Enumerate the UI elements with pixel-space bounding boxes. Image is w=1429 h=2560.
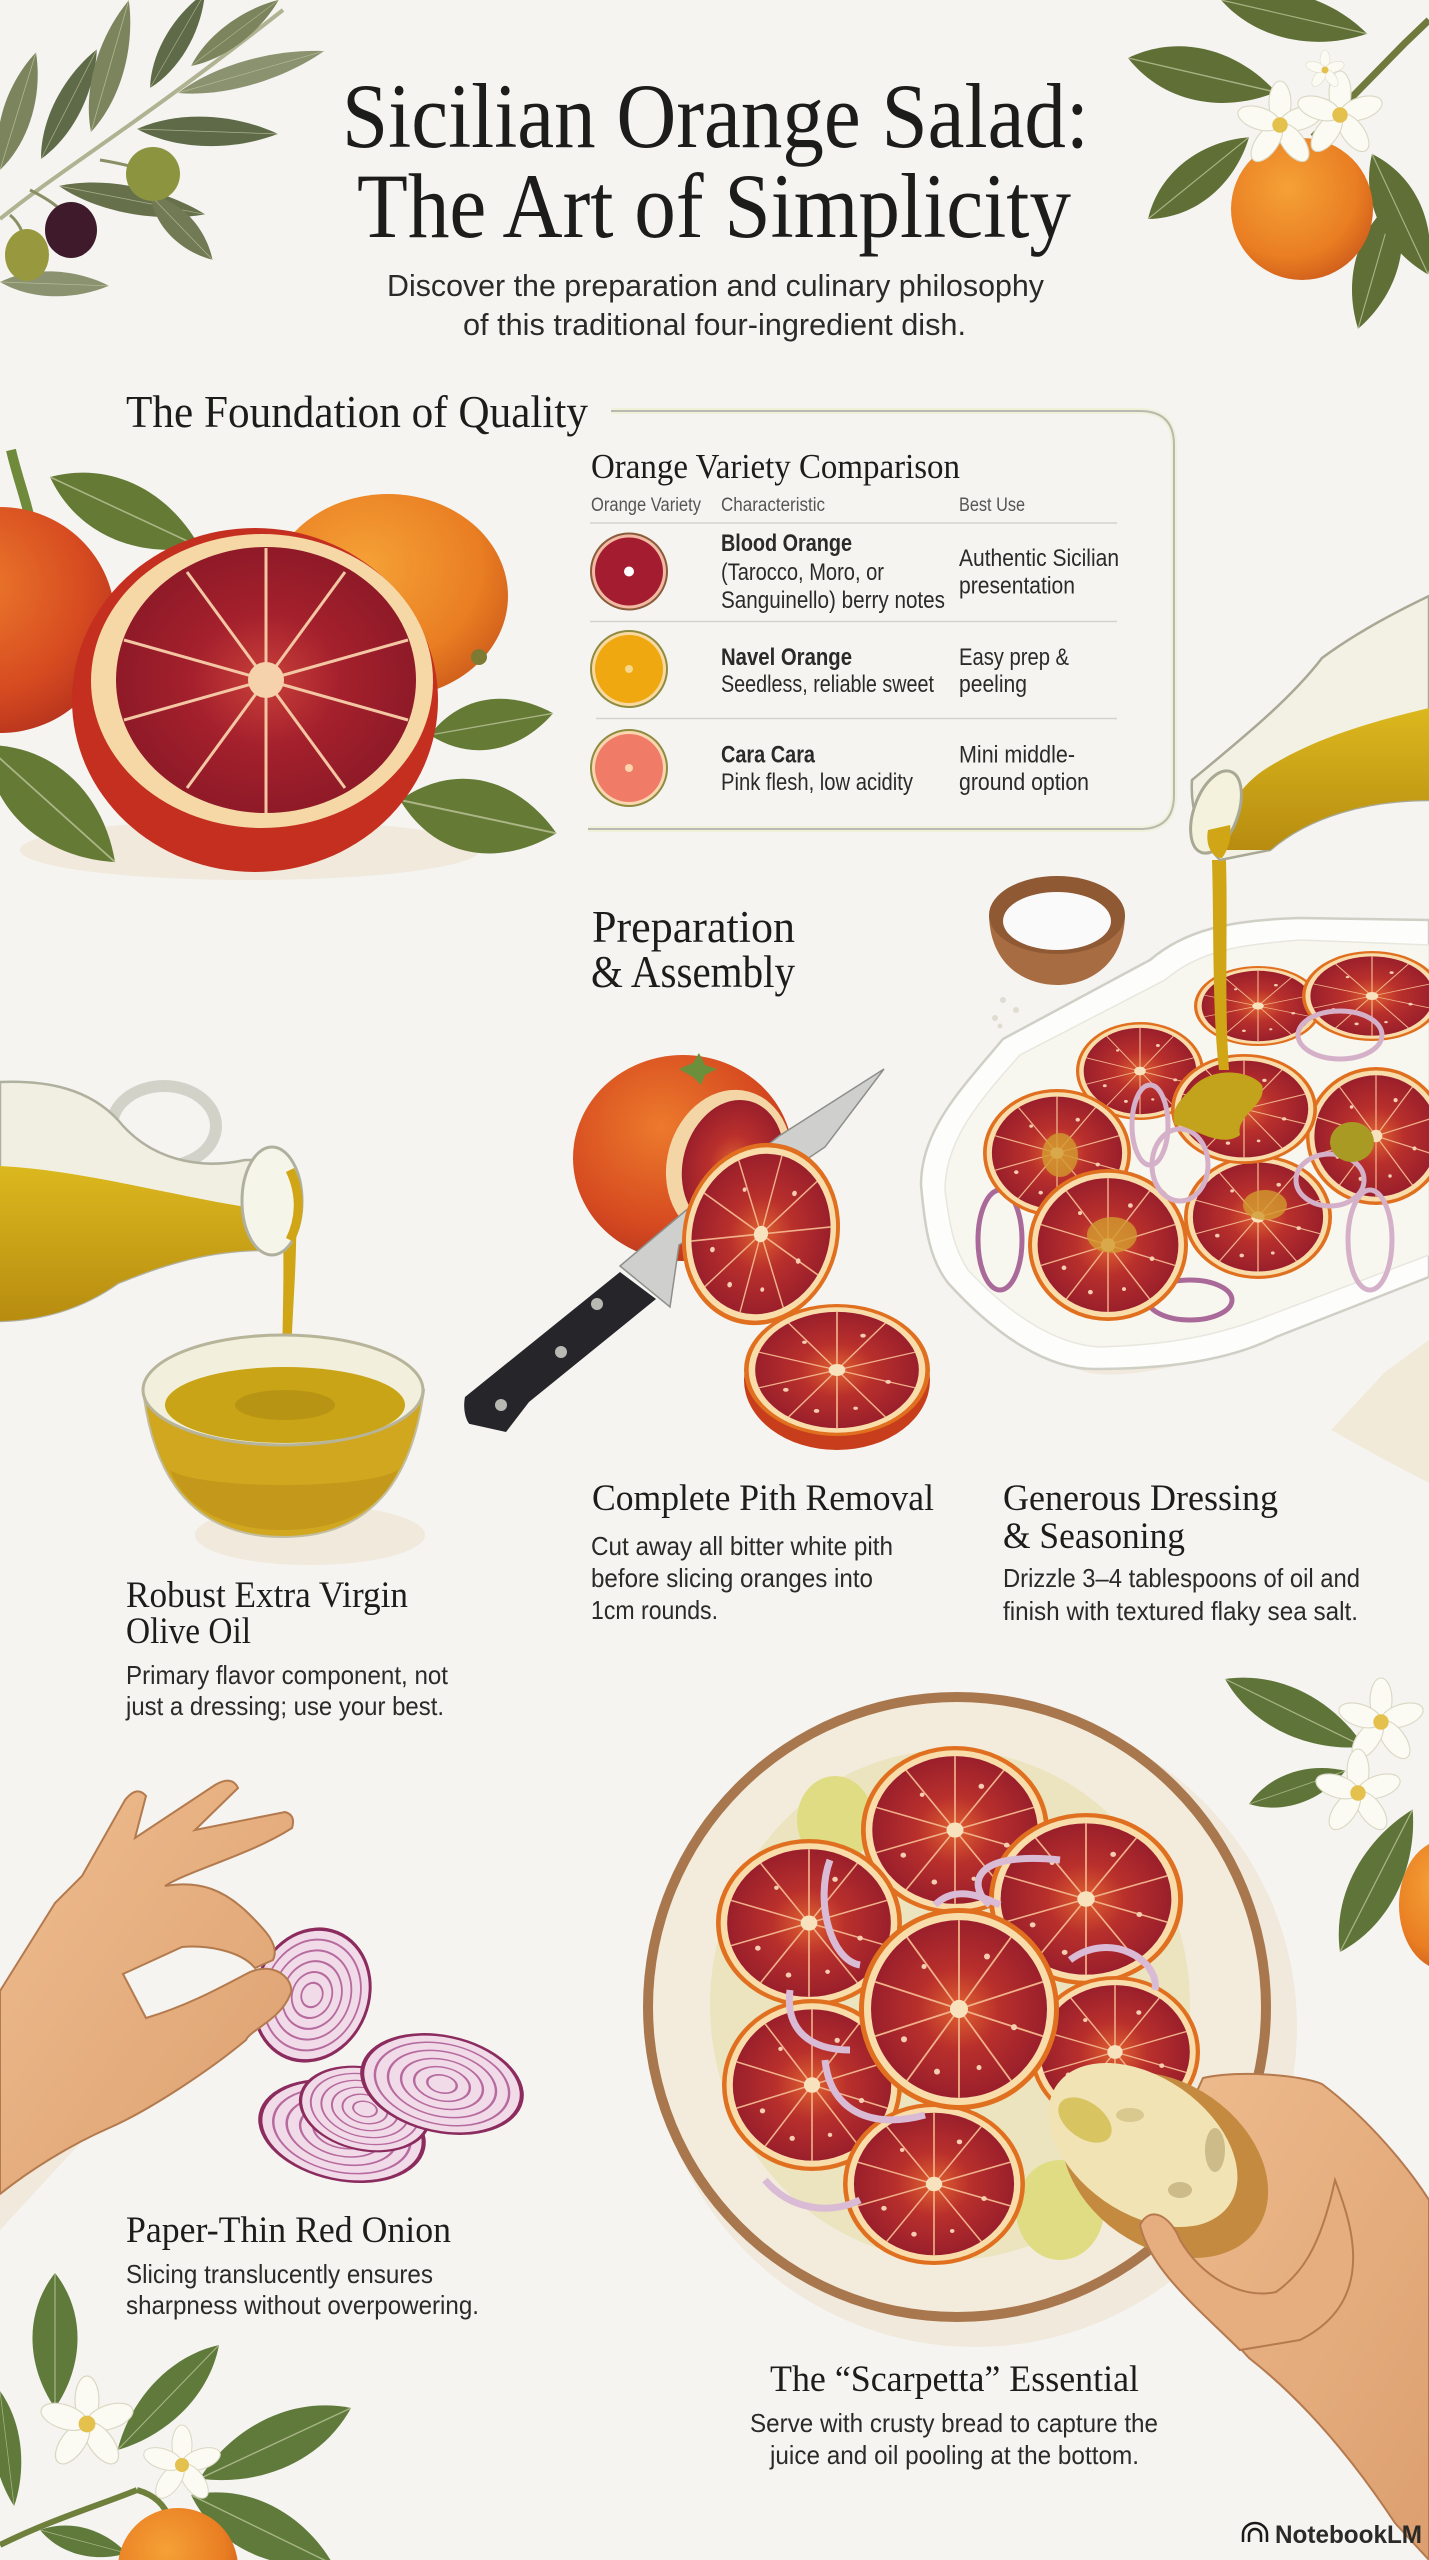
heading: robust olive oil: Olive Oil [126,1611,251,1652]
heading: generous dressing: & Seasoning [1003,1516,1185,1557]
text: pith removal: 1cm rounds. [591,1595,718,1625]
row: cara cara: Mini middle- [959,742,1075,768]
icon: blood orange slice [590,532,668,610]
text: red onion [126,2259,479,2320]
icon: navel orange slice [590,630,668,708]
text: scarpetta [750,2408,1158,2470]
orange blossom branch, bottom left [0,2273,362,2560]
hero oranges [0,450,564,887]
row: blood orange: presentation [959,572,1075,600]
icon: salt bowl [989,876,1125,1028]
title: Sicilian Orange Salad: [342,65,1089,167]
heading: paper-thin red onion: Paper-Thin Red Onion [126,2210,451,2251]
row: blood orange: Blood Orange [721,530,852,557]
text: red onion: Slicing translucently ensures [126,2259,433,2289]
NotebookLM logo: NotebookLM [1275,2521,1422,2549]
hand holding onion slice [0,1781,533,2198]
soft illustration shadows [0,820,1425,2347]
text: scarpetta: Serve with crusty bread to capture the [750,2408,1158,2438]
text: olive oil: just a dressing; use your best. [125,1691,444,1721]
heading: complete pith removal: Complete Pith Removal [592,1478,934,1519]
title [342,65,1089,257]
icon: folded napkin [1331,1340,1429,1483]
text: pith removal [591,1531,893,1625]
platter of dressed slices [921,918,1429,1369]
row: navel orange [590,630,1069,708]
table header [591,495,1025,516]
heading: the scarpetta essential: The “Scarpetta” Essential [770,2359,1139,2400]
panel: orange variety comparison [588,411,1174,829]
text: olive oil [125,1660,449,1721]
glass bowl of olive oil [143,1335,424,1537]
text: dressing: finish with textured flaky sea salt. [1003,1596,1358,1626]
heading: robust olive oil: Robust Extra Virgin [126,1575,408,1616]
bottle pouring oil, top right [1181,596,1429,1070]
text: scarpetta: juice and oil pooling at the bottom. [769,2440,1139,2470]
subtitle [387,268,1044,342]
table header: Orange Variety [591,495,701,516]
row: cara cara: Cara Cara [721,742,816,768]
row: cara cara: Pink flesh, low acidity [721,769,913,796]
heading: the foundation of quality: The Foundation of Quality [126,386,588,437]
row: blood orange: Authentic Sicilian [959,545,1119,572]
text: olive oil: Primary flavor component, not [126,1660,449,1690]
subtitle: of this traditional four-ingredient dish. [463,307,966,342]
row: blood orange [590,530,1119,614]
subtitle: Discover the preparation and culinary philosophy [387,268,1044,303]
heading: generous dressing [1003,1478,1278,1557]
text: dressing: Drizzle 3–4 tablespoons of oil and [1003,1563,1360,1593]
heading: preparation and assembly [591,902,795,997]
heading: robust olive oil [126,1575,408,1652]
row: navel orange: peeling [959,671,1027,698]
title: The Art of Simplicity [357,155,1071,257]
text: red onion: sharpness without overpowering. [126,2290,479,2320]
heading: preparation and assembly: & Assembly [591,947,795,997]
olive branch, top left [0,0,328,298]
serving plate with slices [643,1692,1271,2322]
row: blood orange: Sanguinello) berry notes [721,587,945,614]
text: dressing [1003,1563,1360,1626]
row: cara cara: ground option [959,769,1089,796]
row: navel orange: Easy prep & [959,644,1069,671]
icon: cara cara slice [590,729,668,807]
hand with crusty bread [1018,2029,1429,2560]
orange blossom branch, middle right [1215,1659,1429,1970]
table header: Best Use [959,495,1025,516]
jug pouring oil, left [0,1082,302,1413]
row: navel orange: Navel Orange [721,644,852,671]
panel title: Orange Variety Comparison [591,447,960,486]
table header: Characteristic [721,495,825,516]
row: navel orange: Seedless, reliable sweet [721,671,934,698]
bread [1018,2029,1304,2296]
orange branch, top right [1122,0,1429,335]
text: pith removal: before slicing oranges into [591,1563,873,1593]
heading: generous dressing: Generous Dressing [1003,1478,1278,1519]
text: pith removal: Cut away all bitter white pith [591,1531,893,1561]
knife [464,1069,884,1432]
heading: preparation and assembly: Preparation [592,902,795,952]
row: cara cara [590,729,1089,807]
cut orange and knife [464,1053,930,1450]
row: blood orange: (Tarocco, Moro, or [721,559,884,586]
